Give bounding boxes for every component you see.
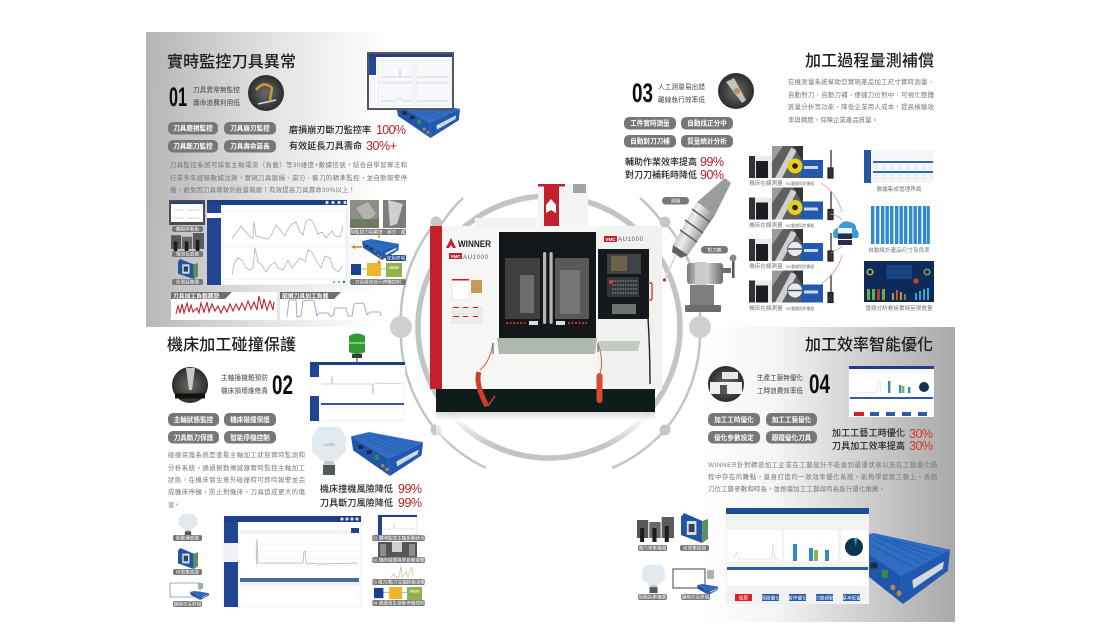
description — [170, 160, 408, 194]
device: signal collector: 信號採集器 — [176, 279, 199, 286]
key figures — [832, 427, 933, 453]
control panel: VMC — [605, 237, 616, 242]
pain points: 生產工藝無優化 — [757, 373, 803, 382]
key figures: 30%+ — [366, 139, 397, 153]
optimisation software large screen: 開啟優化 — [761, 594, 780, 602]
step thumbnails: 02 機床碰撞異常自動報警 — [372, 557, 425, 564]
data management screen: 數據集成管理界面 — [877, 185, 922, 193]
device: vibration sensor small — [173, 514, 202, 542]
pain points — [221, 373, 268, 395]
description: 機，避免因刀具導致的批量報廢！有效提高刀具壽命30%以上！ — [170, 185, 355, 194]
measure row 1: NC數據同步模組 — [786, 181, 814, 186]
number 04: 04 — [809, 369, 830, 399]
number 01: 01 — [169, 82, 187, 112]
description — [168, 450, 306, 509]
description: 害。 — [168, 500, 180, 509]
feature pills: 工件實時測量 — [630, 118, 670, 128]
description: 刀位工藝參數和時長，並根據加工工藝與時長進行優化推薦。 — [708, 484, 885, 493]
feature pills: 刀具壽命延長 — [230, 142, 270, 150]
device: signal integrator: 信號集成器 — [683, 545, 706, 552]
description — [708, 460, 938, 493]
device: vibration collector — [638, 565, 667, 601]
optimisation software large screen: 復原 — [739, 594, 748, 602]
device: touch screen — [169, 200, 205, 233]
trend chart: worn tool load: 磨損刀具加工負載 — [282, 292, 329, 300]
device: edge terminal — [673, 569, 718, 601]
control panel: AU1000 — [618, 237, 644, 243]
feature pills: 刀具磨損監控 — [173, 124, 213, 132]
description: 質量分析等功能，降低企業用人成本，提高檢驗效 — [788, 102, 935, 111]
CNC machining centre WINNER VMC AU1000 — [430, 184, 662, 446]
device: vibration sensor small: 振動傳感器 — [176, 535, 199, 542]
measure row 4: NC數據同步模組 — [786, 306, 814, 311]
description: 刀具監控系統可採集主軸電流（負載）等30維度+數據信號，結合自學習算法和 — [170, 160, 407, 169]
device: signal integrator — [680, 513, 709, 552]
key figures: 有效延長刀具壽命 — [289, 140, 362, 151]
icon: cloud server — [833, 221, 859, 245]
description: 成機床停機，防止對機床、刀具造成更大的傷 — [168, 487, 306, 496]
key figures: 30% — [909, 439, 933, 453]
icon: green signal light — [349, 334, 365, 362]
tool setter label — [701, 246, 728, 254]
device: large blue terminal — [848, 533, 950, 604]
device: current transformers: 電流互感器 — [176, 251, 199, 258]
description: 分析系統。通過振動傳感器實時監控主軸加工 — [168, 463, 306, 472]
measure row 1 — [749, 146, 833, 187]
software screen: spindle load charts — [207, 200, 347, 285]
trend chart: worn tool load — [280, 292, 383, 320]
dashboard: quality overview: 匯總分析看板實時呈現質量 — [865, 304, 933, 312]
number 02: 02 — [272, 370, 293, 400]
icon: tool photo — [248, 75, 284, 111]
software screen: vibration — [310, 362, 405, 421]
key figures — [289, 123, 406, 153]
feature pills — [168, 413, 276, 444]
key figures: 90% — [700, 168, 724, 182]
measure row 4: 機床在線測量 — [749, 304, 783, 312]
step thumbnails: 04 碰撞發生自動停機控制 — [372, 600, 425, 607]
tool probe — [663, 178, 731, 282]
description: 碰撞保護系統是查看主軸加工狀態實時監測和 — [168, 450, 305, 459]
feature pills — [708, 413, 817, 444]
feature pills: 跟蹤優化刀具 — [772, 433, 812, 442]
feature pills — [168, 122, 276, 152]
photos: tool wear, chipping, breakage — [346, 200, 411, 236]
device: current collector — [637, 517, 674, 552]
red coolant hoses — [478, 343, 602, 406]
measure row 2: 機床在線測量 — [749, 221, 783, 229]
feature pills: 優化參數設定 — [714, 433, 754, 442]
feature pills: 自動找正分中 — [687, 118, 727, 128]
pain points — [757, 373, 803, 395]
monitor dashboard with terminal — [367, 52, 460, 138]
central ring — [390, 196, 711, 468]
key figures: 刀具加工效率提高 — [832, 440, 905, 451]
measure row 3 — [749, 229, 833, 270]
device: signal integrator: 信號集成器 — [176, 569, 199, 576]
step thumbnails — [372, 515, 426, 607]
bar chart: size and yield: 自動統計產品尺寸及良率 — [868, 246, 930, 254]
device: touch screen: 觸摸屏看板 — [176, 226, 199, 233]
device: edge terminal: 邊緣交互終端 — [174, 601, 202, 608]
icon: machine photo — [708, 366, 744, 402]
device: signal collector — [172, 259, 203, 286]
key figures: 輔助作業效率提高 — [625, 156, 697, 167]
logo — [446, 238, 491, 261]
description: 自動對刀、自動刀補、便捷刀位對中、可視化整體 — [788, 90, 935, 99]
probe label: 測頭 — [671, 198, 680, 205]
description: 程中存在的難點，量身打造的一款效率優化系統。能夠學習原工藝上，各個 — [708, 472, 937, 481]
feature pills: 機床碰撞保護 — [230, 415, 270, 424]
key figures: 磨損崩刃斷刀監控率 — [289, 124, 371, 135]
number 03: 03 — [632, 78, 653, 108]
optimisation software large screen: 暫停優化 — [788, 594, 807, 602]
panel 01: real-time tool anomaly monitoring — [167, 52, 460, 320]
measure row 3: 機床在線測量 — [749, 262, 783, 270]
key figures: 99% — [398, 482, 422, 496]
bar chart: size and yield — [866, 205, 930, 254]
device: vibration collector: 振動採集儀器 — [639, 594, 667, 601]
measure row 1: 機床在線測量 — [749, 179, 783, 187]
step thumbnails: 03 撞刀/斷刀主軸振動波動 — [372, 579, 426, 586]
stop control flow — [350, 263, 406, 286]
device: vibration sensor — [312, 427, 346, 475]
feature pills — [624, 117, 733, 148]
device: edge terminal: 邊緣交互終端 — [682, 594, 710, 601]
description: 狀態，在機床發生意外碰撞時可即時報警並完 — [168, 475, 306, 484]
optimisation software large screen: 基本配置 — [842, 594, 861, 602]
pain points — [658, 82, 705, 104]
pain points: 離線執行效率低 — [658, 95, 705, 104]
feature pills: 加工工時優化 — [714, 415, 754, 424]
tool setter label: 對刀儀 — [708, 247, 722, 254]
device: current transformers — [171, 233, 204, 258]
key figures: 刀具斷刀風險降低 — [320, 497, 393, 508]
pain points — [193, 85, 240, 107]
trend chart: tool load: 刀具加工負載趨勢 — [173, 292, 220, 300]
description: 行業多年經驗數據沈澱，實現刀具磨損、崩刃、斷刀的精準監控，並自動報警停 — [170, 173, 408, 182]
machine doors — [499, 232, 596, 338]
panel 04: machining efficiency optimisation — [637, 336, 950, 604]
key figures: 99% — [700, 155, 724, 169]
key figures — [625, 155, 724, 182]
heading: 加工效率智能優化 — [805, 336, 933, 354]
stop control flow: 刀具異常提示停機控制 — [355, 279, 401, 286]
key figures: 30% — [909, 427, 933, 441]
key figures: 對刀刀補耗時降低 — [625, 169, 697, 180]
icon: measuring photo — [718, 73, 754, 109]
feature pills: 質量統計分析 — [687, 136, 727, 146]
panel: machining efficiency optimisation background — [700, 327, 955, 622]
heading: 加工過程量測補償 — [805, 52, 934, 70]
panel 03: in-process measurement compensation — [624, 52, 935, 312]
description: WINNER針對精密加工企業在工藝設計不能達到最優狀態以及在工藝優化過 — [708, 460, 938, 469]
measure row 2: NC數據同步模組 — [786, 223, 814, 228]
pain points: 壽命浪費利用低 — [193, 98, 240, 107]
heading: 機床加工碰撞保護 — [167, 335, 296, 354]
icon: spindle photo — [172, 367, 208, 403]
feature pills: 自動對刀刀補 — [630, 136, 670, 146]
custom terminal with orange arrows: 定製終端 — [387, 255, 406, 262]
optimisation software large screen: 刀路調動 — [815, 594, 834, 602]
panel: real-time tool monitoring background — [146, 32, 386, 327]
panel 02: collision protection — [167, 334, 426, 608]
feature pills: 刀具崩刃監控 — [230, 124, 270, 132]
logo: AU1000 — [463, 255, 489, 261]
device: blue terminal — [351, 432, 423, 476]
probe label — [662, 197, 689, 205]
device: current collector: 電力采集儀器 — [639, 545, 667, 552]
custom terminal with orange arrows — [351, 231, 406, 266]
feature pills: 刀具斷刀監控 — [173, 142, 213, 150]
measure row 2 — [749, 188, 833, 229]
key figures: 99% — [398, 496, 422, 510]
control panel — [598, 236, 652, 384]
description — [788, 77, 935, 124]
arrows to cloud — [821, 183, 842, 284]
description: 在機測量系統幫助您實現產品加工尺寸實時測量、 — [788, 77, 934, 86]
measure row 4 — [749, 270, 833, 312]
step thumbnails: 01 實時監控主軸振動狀況 — [372, 535, 425, 542]
key figures: 機床撞機風險降低 — [320, 483, 393, 494]
optimisation software large screen — [726, 508, 869, 604]
tool setter — [685, 254, 736, 312]
key figures: 100% — [376, 123, 406, 137]
measure row 3: NC數據同步模組 — [786, 264, 814, 269]
device: vibration sensor: SIGER — [323, 443, 335, 447]
description: 率與精度，保障企業產品質量。 — [788, 115, 878, 124]
key figures: 加工工藝工時優化 — [832, 427, 905, 438]
software screen: spindle vibration chart — [224, 516, 361, 607]
logo: WINNER — [458, 239, 491, 249]
feature pills: 加工工藝優化 — [772, 415, 812, 424]
pain points: 主軸撞機難預防 — [221, 373, 268, 382]
trend chart: tool load — [171, 292, 277, 320]
dashboard: quality overview — [864, 261, 934, 312]
heading: 實時監控刀具異常 — [167, 53, 296, 71]
device: signal integrator — [173, 548, 202, 576]
pain points: 工時浪費效率低 — [757, 386, 803, 395]
photos: tool wear, chipping, breakage: 實時監控刀具磨損、崩刃、斷刀 — [346, 229, 411, 236]
feature pills: 刀具斷刀保護 — [174, 433, 214, 442]
key figures — [320, 482, 422, 510]
feature pills: 主軸狀態監控 — [174, 415, 214, 424]
data management screen — [864, 150, 934, 193]
pain points: 刀具異常無監控 — [193, 85, 240, 94]
logo: VMC — [450, 254, 461, 259]
pain points: 人工測量易出錯 — [658, 82, 705, 91]
pain points: 機床損壞維修貴 — [221, 386, 268, 395]
safety labels — [452, 279, 482, 323]
optimisation software screen — [849, 366, 934, 417]
feature pills: 智能停機控制 — [230, 433, 270, 442]
device: edge terminal — [170, 583, 209, 608]
